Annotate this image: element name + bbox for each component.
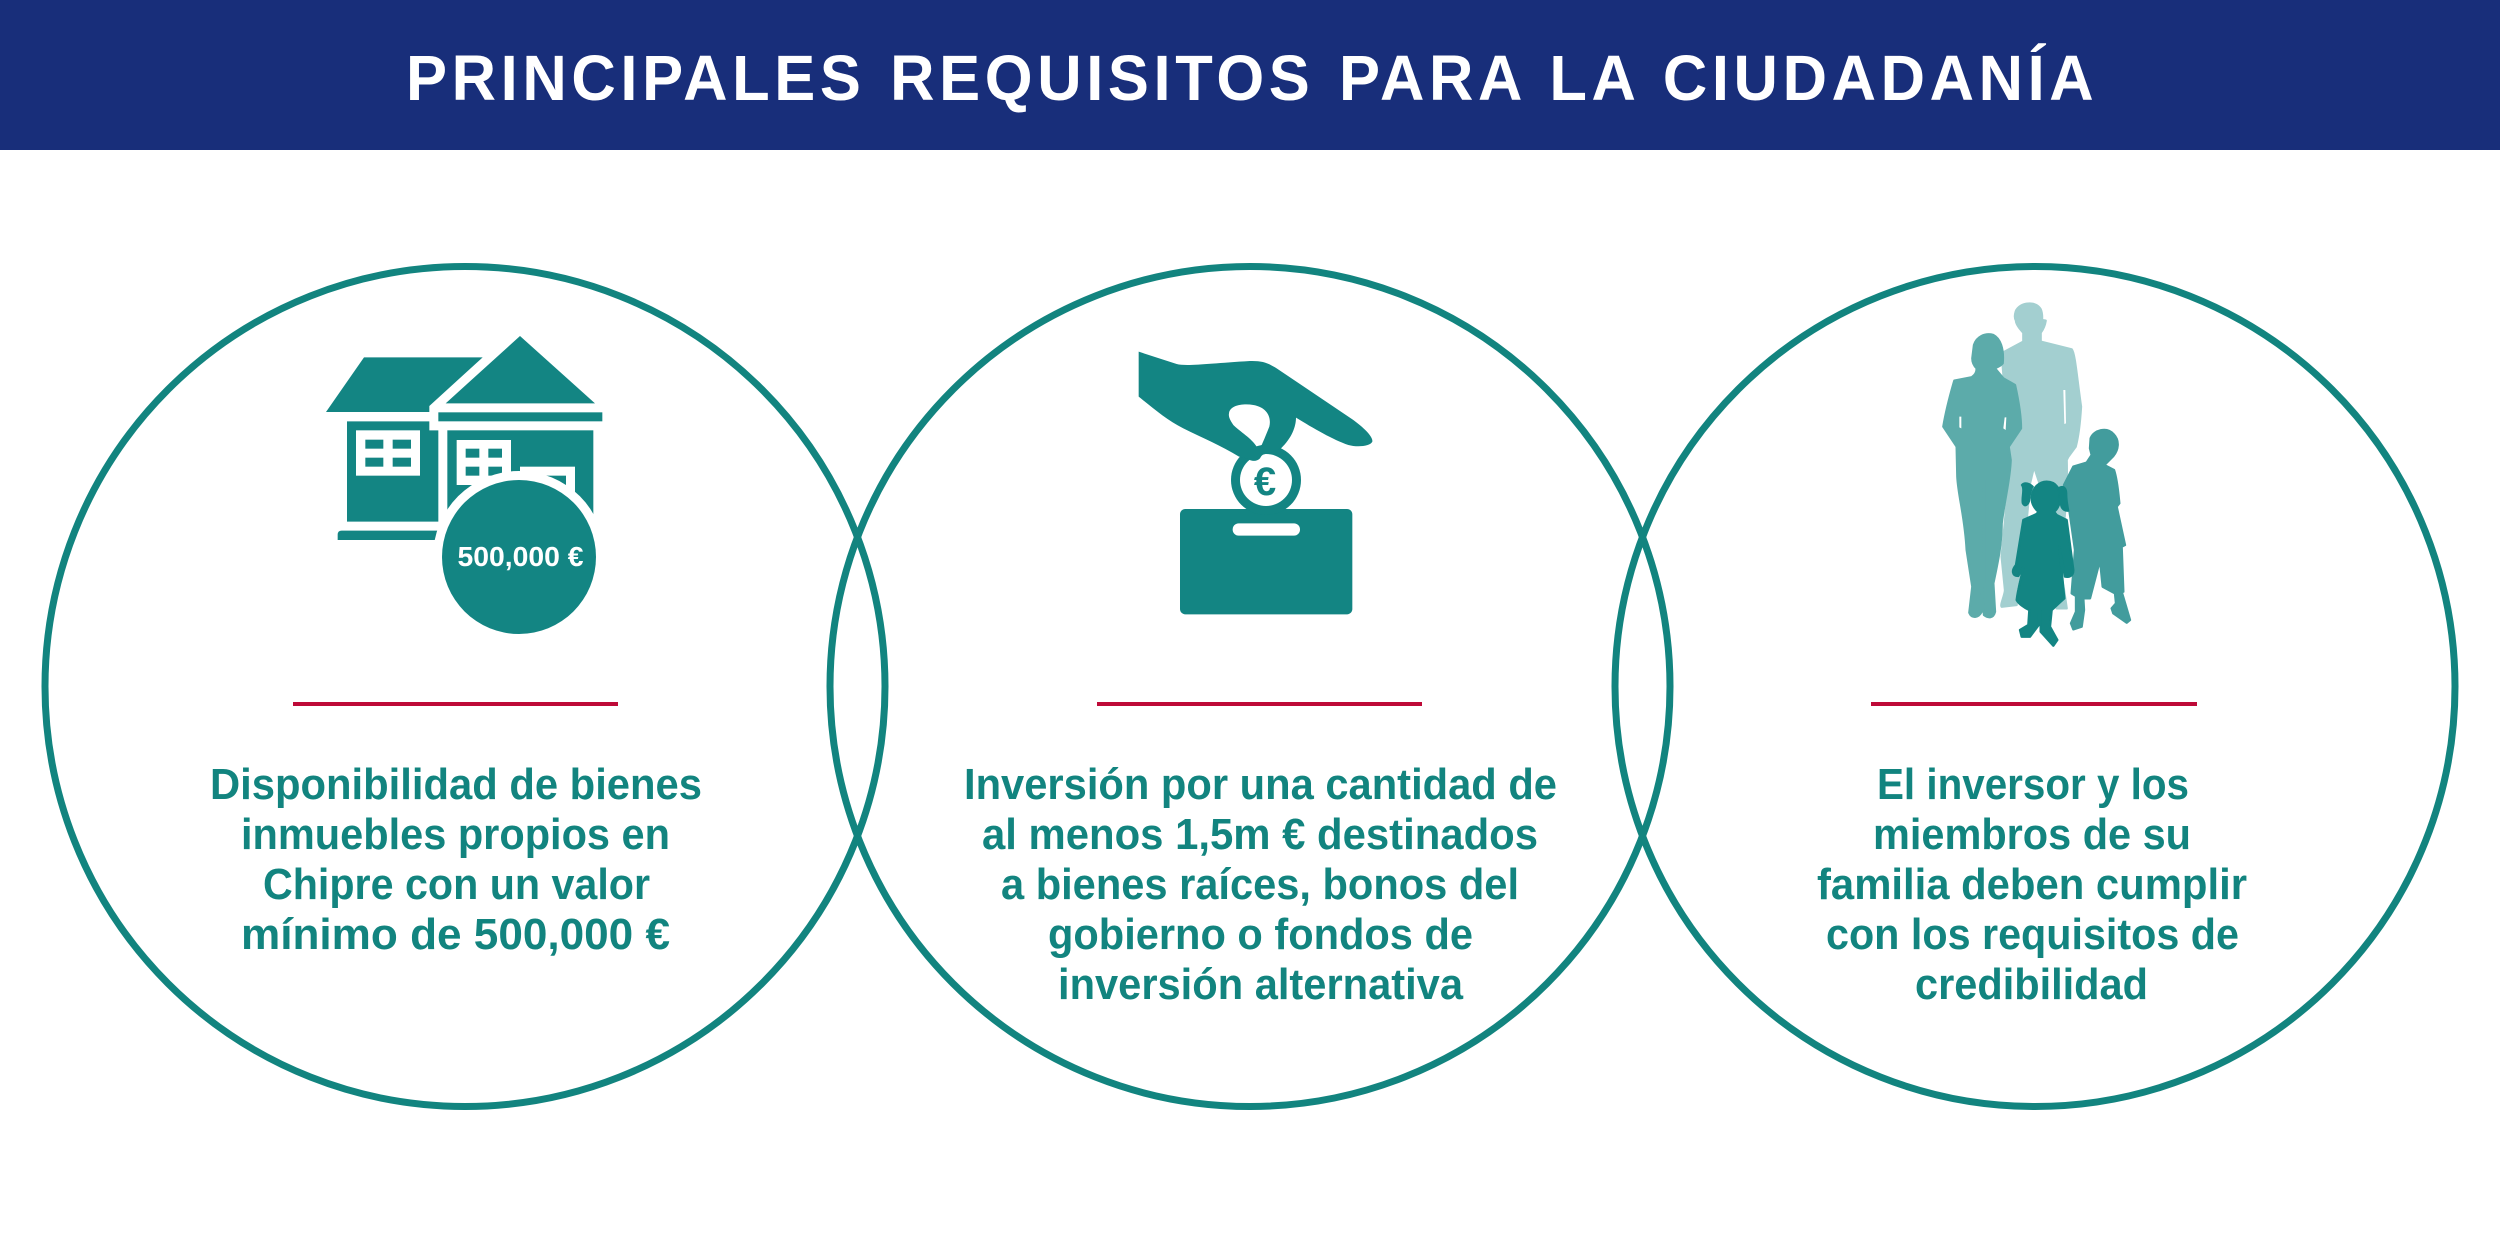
text block 3: El inversor y los bbox=[1877, 760, 2189, 809]
icon: hand dropping coin into box bbox=[1139, 352, 1372, 614]
circle outline 2 bbox=[830, 266, 1670, 1106]
text block 2 bbox=[964, 760, 1557, 1009]
divider line 1 bbox=[293, 702, 618, 706]
circle outline 3 bbox=[1615, 266, 2455, 1106]
silhouette: girl bbox=[2013, 482, 2073, 646]
text block 2: a bienes raíces, bonos del bbox=[1001, 860, 1519, 909]
text block 2: inversión alternativa bbox=[1058, 960, 1463, 1009]
divider line 2 bbox=[1097, 702, 1422, 706]
divider line 3 bbox=[1871, 702, 2197, 706]
text block 1 bbox=[210, 760, 702, 959]
panel: family requirement bbox=[1615, 266, 2455, 1106]
icon: euro sign on coin: € bbox=[1254, 460, 1276, 504]
silhouette: woman bbox=[1943, 334, 2021, 617]
panel: property requirement bbox=[45, 266, 885, 1106]
silhouette: man bbox=[2001, 304, 2081, 608]
text block 1: Disponibilidad de bienes bbox=[210, 760, 702, 809]
title: PRINCIPALES REQUISITOS PARA LA CIUDADANÍA bbox=[406, 43, 2094, 114]
text block 3: familia deben cumplir bbox=[1817, 860, 2247, 909]
panel: investment requirement bbox=[830, 266, 1670, 1106]
silhouette: boy bbox=[2064, 430, 2130, 629]
icon: family silhouettes bbox=[1943, 304, 2130, 646]
text block 3: credibilidad bbox=[1915, 960, 2148, 1009]
text block 1: Chipre con un valor bbox=[263, 860, 650, 909]
text block 1: mínimo de 500,000 € bbox=[241, 910, 670, 959]
text block 3: miembros de su bbox=[1873, 810, 2191, 859]
circle outline 1 bbox=[45, 266, 885, 1106]
text block 2: gobierno o fondos de bbox=[1048, 910, 1473, 959]
text block 1: inmuebles propios en bbox=[241, 810, 670, 859]
header banner bbox=[0, 0, 2500, 150]
text block 3 bbox=[1817, 760, 2247, 1009]
text block 2: Inversión por una cantidad de bbox=[964, 760, 1557, 809]
text block 3: con los requisitos de bbox=[1826, 910, 2239, 959]
text block 2: al menos 1,5m € destinados bbox=[982, 810, 1538, 859]
badge value: 500,000 € bbox=[458, 541, 584, 572]
icon: houses with price badge bbox=[326, 336, 605, 643]
